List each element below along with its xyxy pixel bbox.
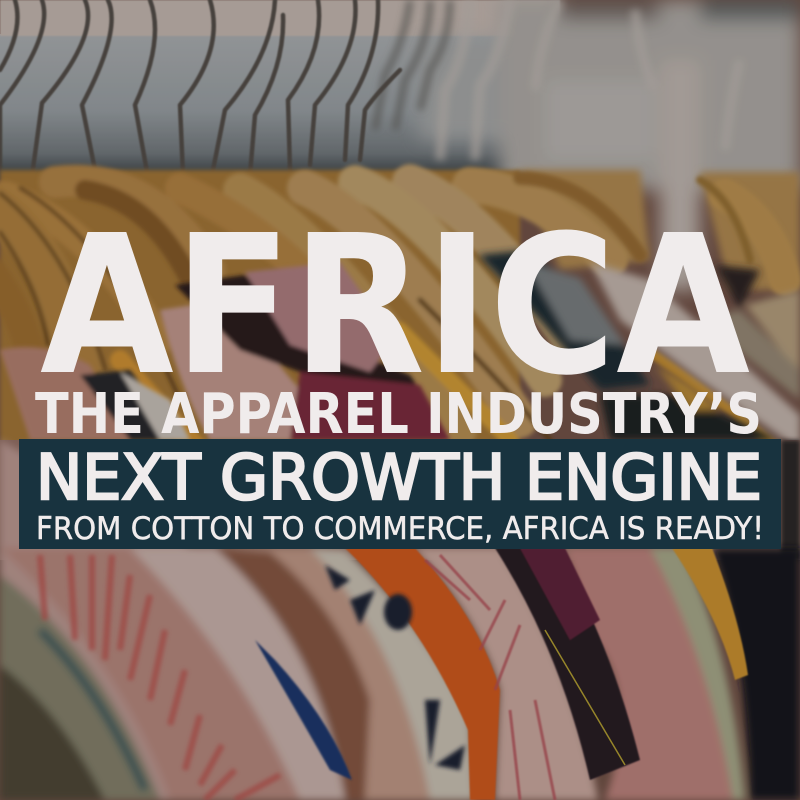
wooden hangers <box>0 170 800 450</box>
plaid shirt stripes <box>425 555 555 800</box>
navy marks on white shirt <box>325 565 465 770</box>
hanger wires <box>0 0 400 178</box>
clothing rail <box>0 0 560 36</box>
blurred background garments <box>420 0 800 290</box>
banner: dark teal headline block <box>19 439 781 549</box>
shirt stripes <box>40 555 280 800</box>
dark plaid lines <box>545 630 625 765</box>
folded clothes in middle band <box>0 262 450 440</box>
heading: next growth engine: NEXT GROWTH ENGINE <box>36 441 762 514</box>
rail wall <box>0 34 560 174</box>
tagline: FROM COTTON TO COMMERCE, AFRICA IS READY! <box>36 511 764 547</box>
lower garments <box>0 440 800 560</box>
